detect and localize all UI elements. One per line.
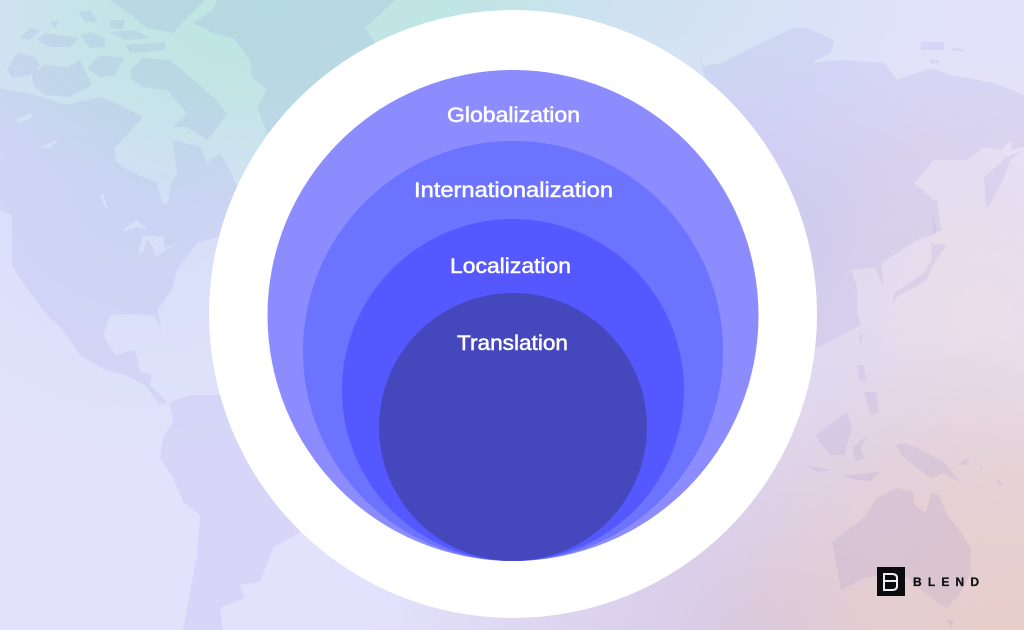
Asia [700, 28, 1024, 348]
circle: Globalization [268, 70, 758, 561]
Japan [892, 243, 947, 305]
Australia [832, 488, 971, 628]
North America [0, 88, 260, 405]
Southeast Asia islands [806, 335, 880, 481]
Arctic islands [7, 0, 227, 140]
label: Internationalization: Internationalization [414, 178, 613, 202]
Kamchatka and Sakhalin [931, 150, 1024, 233]
logo mark [877, 567, 905, 596]
New Guinea and Pacific islands [896, 443, 1003, 486]
Greenland [193, 0, 400, 133]
circle: Translation [379, 293, 647, 561]
concentric circles diagram [209, 10, 817, 618]
circle: Localization [342, 219, 684, 561]
circle: Internationalization [303, 141, 723, 561]
label: Globalization: Globalization [447, 103, 580, 127]
label: Localization: Localization [450, 254, 571, 278]
circle labels [414, 103, 613, 355]
logo wordmark: BLEND [913, 575, 979, 589]
Russian Arctic islands [921, 42, 964, 64]
label: Translation: Translation [457, 331, 568, 355]
white outer circle [209, 10, 817, 618]
South America [160, 395, 340, 630]
logo: BLEND [877, 567, 979, 596]
